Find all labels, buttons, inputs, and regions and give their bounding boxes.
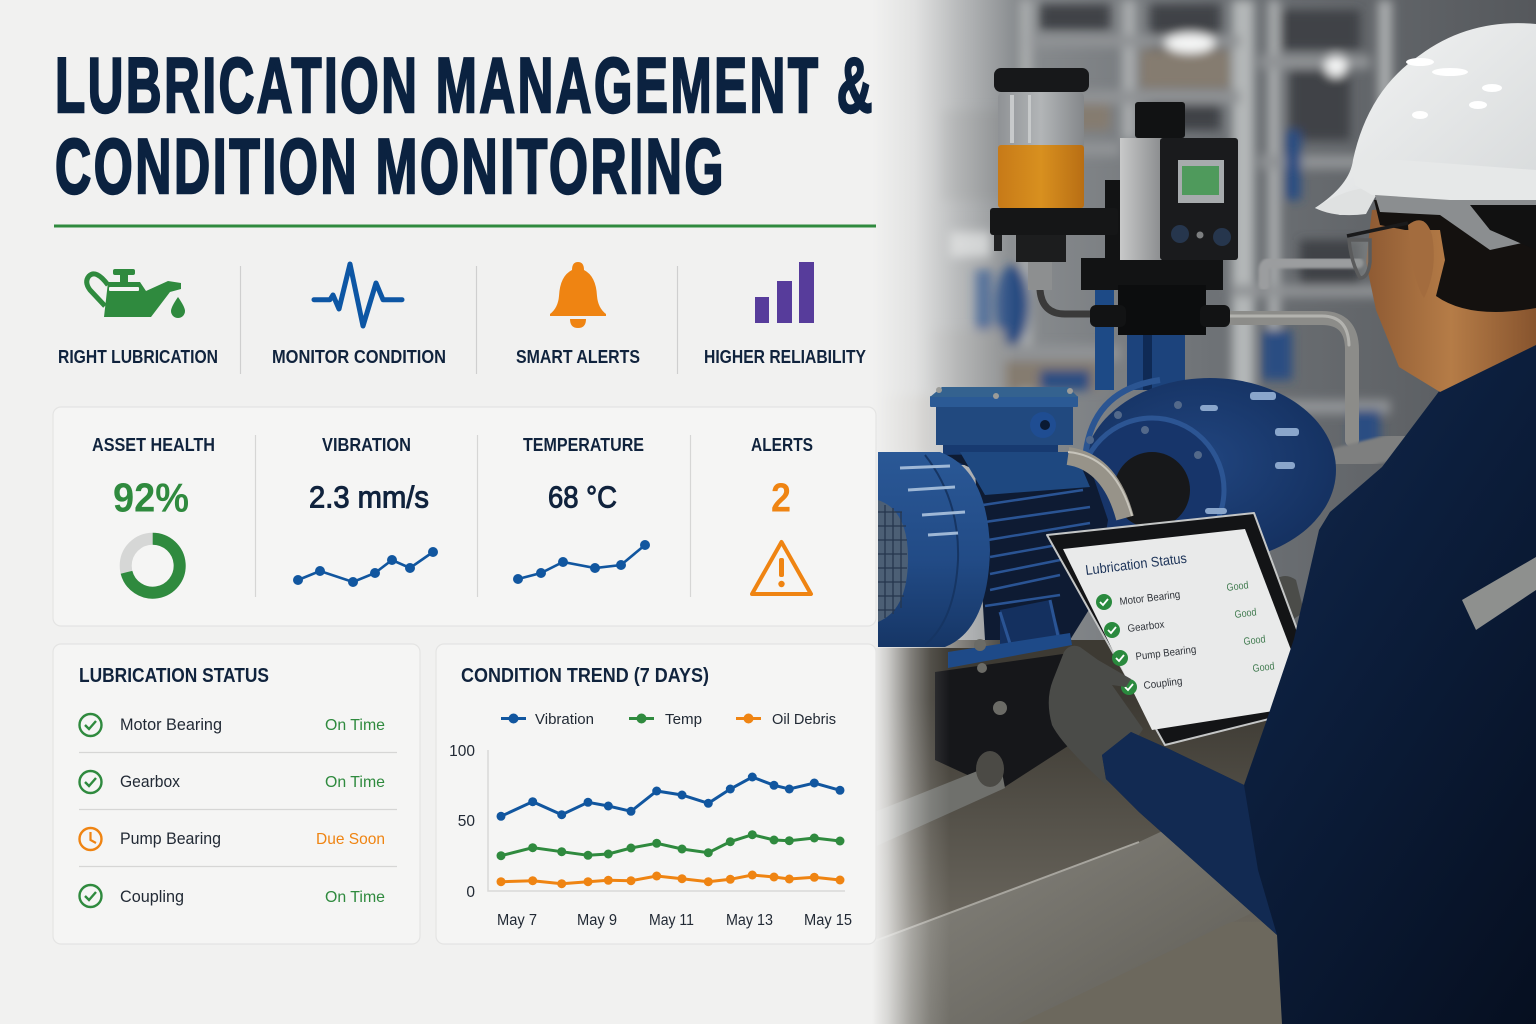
chart legend	[501, 711, 836, 728]
coupling and shaft	[1068, 456, 1125, 518]
row: gearbox: Gearbox	[120, 773, 181, 791]
icon: alert bell	[550, 262, 606, 328]
tablet showing lubrication status	[1047, 513, 1325, 745]
tablet status rows: Gearbox	[1127, 618, 1166, 635]
chart axes: May 15	[804, 912, 852, 929]
title: CONDITION MONITORING	[55, 122, 726, 210]
panel: KPI metrics	[53, 407, 876, 626]
motor junction box	[930, 387, 1078, 465]
row: coupling	[80, 885, 385, 907]
row: coupling: Coupling	[120, 888, 184, 906]
KPI headings: ASSET HEALTH	[92, 435, 215, 455]
row: pump bearing	[80, 828, 385, 850]
series: oil debris	[496, 870, 844, 888]
title	[55, 41, 875, 210]
KPI headings: TEMPERATURE	[523, 435, 644, 455]
tablet status rows: Pump Bearing	[1135, 644, 1197, 663]
chart legend: Temp	[665, 711, 702, 728]
tablet title: Lubrication Status	[1084, 550, 1188, 578]
KPI headings: VIBRATION	[322, 435, 411, 455]
feature row	[58, 262, 866, 374]
tablet status rows: Good	[1226, 579, 1249, 594]
electric motor body with cooling fins	[878, 452, 1132, 650]
KPI values: 2	[771, 474, 791, 520]
blue pump column	[1095, 290, 1185, 390]
series: vibration	[496, 772, 844, 821]
worker jacket and arm	[1102, 343, 1536, 1024]
worker head and neck	[1366, 200, 1536, 392]
status heading: LUBRICATION STATUS	[79, 665, 269, 687]
blurred plant background	[880, 0, 1392, 455]
lower white fade over floor	[872, 648, 950, 1024]
row: pump bearing: Pump Bearing	[120, 830, 221, 848]
tablet status rows: Coupling	[1143, 675, 1183, 692]
tablet status rows	[1096, 579, 1275, 695]
chart axes: May 7	[497, 912, 537, 929]
industrial photo: worker checking lubricator and pump	[872, 0, 1536, 1024]
row: motor bearing	[80, 714, 385, 736]
icon: oil can	[87, 269, 185, 318]
feature labels: MONITOR CONDITION	[272, 347, 446, 367]
tablet status rows: Good	[1243, 633, 1266, 648]
row: motor bearing: Motor Bearing	[120, 716, 222, 734]
white hard hat	[1315, 23, 1536, 250]
feature labels	[58, 347, 866, 367]
vibration sparkline	[293, 547, 438, 587]
row: gearbox	[80, 771, 385, 793]
overhead metal pipes	[1040, 263, 1420, 460]
icon: vibration pulse	[314, 264, 402, 326]
tablet status rows: Good	[1252, 660, 1275, 675]
icon: warning triangle	[752, 542, 811, 594]
oil lubricator cup	[990, 68, 1118, 290]
tablet status rows: Motor Bearing	[1119, 589, 1181, 608]
KPI values: 92%	[113, 474, 189, 520]
chart axes: 0	[466, 884, 475, 901]
icon: reliability bars	[755, 262, 814, 323]
chart axes	[449, 743, 852, 929]
white fade over plant background	[872, 0, 1015, 648]
chart axes: May 11	[649, 912, 694, 929]
lubricator mount and black fittings	[1081, 180, 1230, 335]
left page area	[0, 0, 872, 1024]
feature labels: HIGHER RELIABILITY	[704, 347, 866, 367]
KPI values: 68 °C	[548, 480, 617, 514]
chart axes: May 9	[577, 912, 617, 929]
panel: condition trend chart	[436, 644, 876, 944]
KPI values: 2.3 mm/s	[309, 480, 429, 514]
title: LUBRICATION MANAGEMENT &	[55, 41, 875, 129]
KPI values	[113, 474, 791, 520]
temperature sparkline	[513, 540, 650, 584]
plant background base	[872, 0, 1536, 720]
chart legend: Oil Debris	[772, 711, 836, 728]
fan cover	[878, 452, 990, 647]
motor mounting base and shaft	[872, 633, 1085, 848]
feature labels: SMART ALERTS	[516, 347, 640, 367]
panel: lubrication status	[53, 644, 420, 944]
row: gearbox: On Time	[325, 774, 385, 791]
chart legend: Vibration	[535, 711, 594, 728]
tablet status rows: Good	[1234, 606, 1257, 621]
chart axes: May 13	[726, 912, 773, 929]
chart heading: CONDITION TREND (7 DAYS)	[461, 665, 709, 687]
blue gearbox housing	[1080, 378, 1336, 562]
title underline	[54, 224, 876, 228]
KPI headings: ALERTS	[751, 435, 813, 455]
row: coupling: On Time	[325, 889, 385, 906]
row: motor bearing: On Time	[325, 717, 385, 734]
chart axes: 100	[449, 743, 475, 760]
KPI headings	[92, 435, 813, 455]
chart axes: 50	[458, 813, 475, 830]
gloved hand	[1049, 646, 1143, 785]
asset health donut	[126, 539, 180, 593]
feature labels: RIGHT LUBRICATION	[58, 347, 218, 367]
safety glasses	[1347, 223, 1408, 278]
series: temp	[496, 830, 844, 860]
floor and concrete plinth	[872, 640, 1372, 1024]
far hand glove behind tablet	[1275, 576, 1304, 625]
condition monitor unit	[1120, 102, 1238, 260]
row: pump bearing: Due Soon	[316, 831, 385, 848]
